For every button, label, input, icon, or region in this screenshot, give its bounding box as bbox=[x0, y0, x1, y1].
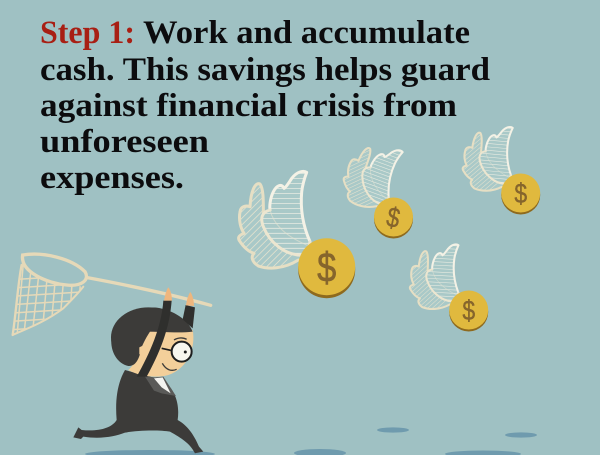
heading text bbox=[40, 15, 490, 196]
collar and shirt bbox=[145, 377, 176, 396]
heading text: unforeseen bbox=[40, 124, 209, 160]
glasses bbox=[172, 342, 192, 362]
large flying coin: $ bbox=[317, 245, 336, 292]
flying coin top right bbox=[453, 122, 540, 214]
heading text: Step 1: bbox=[40, 15, 135, 51]
ear bbox=[139, 345, 152, 357]
raised arm bbox=[137, 301, 172, 377]
face bbox=[128, 330, 193, 377]
hair bbox=[111, 307, 186, 367]
far arm bbox=[183, 305, 195, 328]
fingers bbox=[164, 287, 172, 301]
heading text: expenses. bbox=[40, 160, 184, 196]
heading text: cash. This savings helps guard bbox=[40, 52, 490, 88]
mouth bbox=[162, 363, 177, 370]
flying coin lower: $ bbox=[462, 296, 475, 327]
heading text: against financial crisis from bbox=[40, 88, 457, 124]
legs and suit bbox=[73, 370, 203, 453]
ground shadows bbox=[85, 427, 537, 455]
heading text: Work and accumulate bbox=[143, 15, 470, 51]
flying coin top right: $ bbox=[514, 179, 527, 210]
butterfly net bbox=[7, 254, 211, 340]
flying coin top centre bbox=[329, 133, 413, 238]
large flying coin bbox=[227, 171, 355, 298]
flying coin top centre: $ bbox=[384, 202, 403, 235]
flying coin lower bbox=[401, 242, 488, 332]
running businessman bbox=[73, 287, 203, 453]
hair fringe bbox=[111, 307, 193, 366]
